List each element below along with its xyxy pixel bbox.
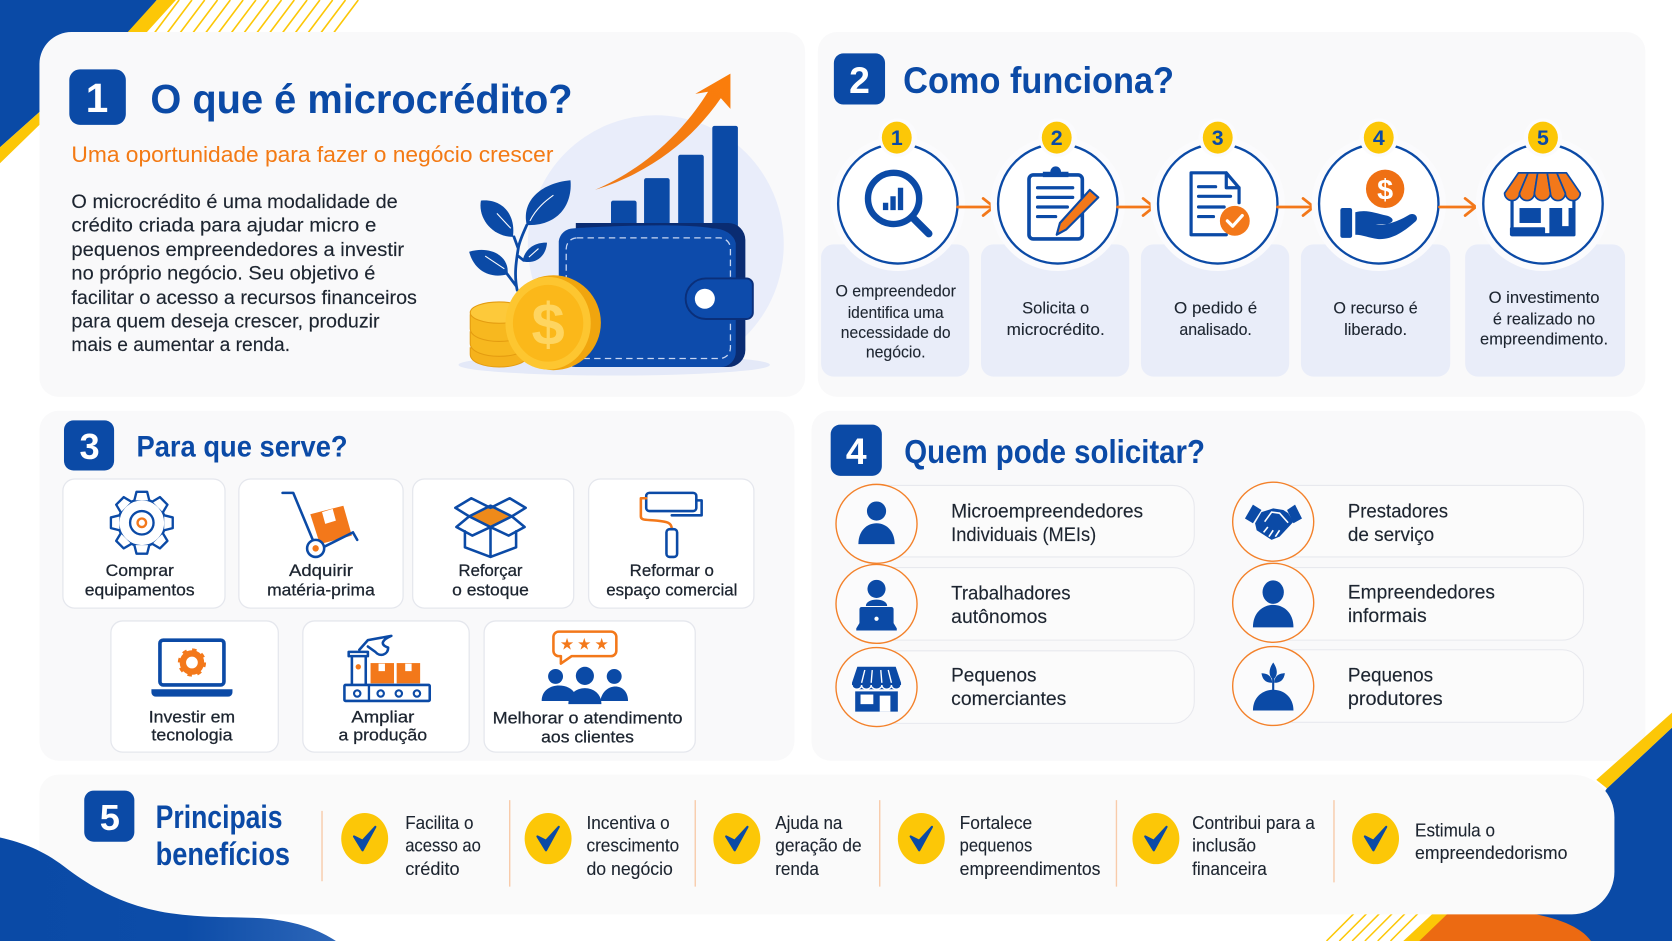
illustration: wallet, coins, plant and growth chart [459,74,784,376]
step 4: liberado. [1344,320,1407,339]
benefit 4: pequenos [960,835,1032,855]
panel: para que serve [39,411,794,761]
step 4: O recurso é [1333,299,1418,318]
heading 4: Quem pode solicitar? [904,434,1205,471]
decorative corner: bottom right [1327,713,1672,941]
item: microempreendedores individuais: Individuais (MEIs) [951,525,1096,546]
badge 4 [831,425,882,476]
benefit 3 [713,813,862,879]
benefit 2: Incentiva o [586,813,670,833]
benefit 2 [525,813,679,879]
item: pequenos produtores: produtores [1348,689,1443,710]
card: comprar equipamentos: Comprar [106,561,174,580]
card: adquirir matéria-prima: Adquirir [289,561,354,580]
benefit 3: geração de [775,835,862,855]
card: investir em tecnologia: tecnologia [151,725,233,744]
arrow [958,198,994,216]
arrow [1118,198,1154,216]
card: comprar equipamentos: equipamentos [85,580,195,599]
body text: crédito criada para ajudar micro e [71,215,377,237]
item: pequenos produtores [1233,647,1583,725]
benefit 2: do negócio [586,859,673,879]
benefit 1: acesso ao [405,835,481,855]
badge 1 [69,69,126,125]
benefit 5: Contribui para a [1192,813,1316,833]
badge 3: 3 [79,426,100,467]
badge 3 [64,420,114,470]
panel: quem pode solicitar [811,411,1645,761]
body text: no próprio negócio. Seu objetivo é [71,263,375,285]
item: prestadores de serviço: de serviço [1348,525,1434,546]
body text: mais e aumentar a renda. [71,334,290,356]
item: microempreendedores individuais: Microempreendedores [951,501,1143,522]
item: microempreendedores individuais [836,484,1194,563]
panel: principais benefícios [39,775,1614,914]
step 1: negócio. [866,342,926,361]
benefit 6 [1352,813,1568,864]
card: ampliar a produção: Ampliar [351,707,415,726]
card: adquirir matéria-prima: matéria-prima [267,580,376,599]
step 2: Solicita o [1022,299,1089,318]
card: reformar o espaço comercial [589,479,754,608]
step 4: $ [1377,175,1393,207]
step 5: O investimento [1489,288,1599,307]
step 5: 5 [1537,126,1549,150]
heading 5: benefícios [156,836,290,872]
heading 5: Principais [156,799,283,835]
step 1: O empreendedor [835,282,956,301]
badge 4: 4 [846,430,867,472]
step 3: analisado. [1179,320,1252,339]
item: trabalhadores autônomos [836,564,1194,643]
item: empreendedores informais: Empreendedores [1348,583,1495,604]
benefit 2: crescimento [586,835,679,855]
benefit 3: renda [775,859,820,879]
item: pequenos comerciantes: Pequenos [951,666,1036,687]
step 4: 4 [1373,126,1385,150]
card: reforçar o estoque: o estoque [452,580,529,599]
benefit 6: empreendedorismo [1415,843,1568,863]
card: adquirir matéria-prima [239,479,403,608]
arrow [1277,198,1314,216]
benefit 5: inclusão [1192,835,1256,855]
card: ampliar a produção [303,621,469,752]
step 3: 3 [1212,126,1224,150]
badge 2: 2 [849,59,870,101]
step 3 [1141,118,1289,377]
badge 5 [84,791,134,842]
step 1: 1 [891,126,903,150]
step 1: identifica uma [848,303,944,322]
item: empreendedores informais: informais [1348,606,1427,627]
step 2 [981,118,1129,377]
badge 2 [834,53,885,105]
arrow [1440,198,1476,216]
heading 5 [156,799,290,872]
body text: O microcrédito é uma modalidade de [71,191,398,213]
benefit 1: Facilita o [405,813,473,833]
item: pequenos comerciantes: comerciantes [951,689,1066,710]
step 4 [1301,118,1450,377]
panel: como funciona [818,32,1645,397]
card: reformar o espaço comercial: espaço comercial [606,580,737,599]
item: empreendedores informais [1233,563,1583,642]
card: investir em tecnologia [111,621,278,752]
illustration: wallet, coins, plant and growth chart: $ [531,291,565,358]
body text [71,191,417,356]
benefit 6: Estimula o [1415,820,1495,840]
card: reforçar o estoque: Reforçar [459,561,523,580]
badge 5: 5 [100,797,120,838]
card: ampliar a produção: a produção [339,725,427,744]
heading 2: Como funciona? [903,59,1174,101]
step 5: empreendimento. [1480,330,1608,349]
badge 1: 1 [86,75,108,121]
item: trabalhadores autônomos: autônomos [951,607,1047,628]
card: investir em tecnologia: Investir em [149,707,235,726]
body text: facilitar o acesso a recursos financeiros [71,287,417,309]
item: prestadores de serviço [1233,482,1583,561]
benefit 5: financeira [1192,859,1268,879]
heading 1: O que é microcrédito? [150,76,573,122]
card: melhorar o atendimento [484,621,695,752]
panel: o que é microcrédito [39,32,805,397]
card: reformar o espaço comercial: Reformar o [630,561,714,580]
item: pequenos produtores: Pequenos [1348,666,1433,687]
benefit 4: Fortalece [960,813,1032,833]
decorative corner: top left [0,0,358,163]
benefit 5 [1132,813,1316,879]
step 1: necessidade do [841,323,951,342]
card: melhorar o atendimento: aos clientes [541,728,634,747]
step 2: 2 [1051,126,1063,150]
benefit 3: Ajuda na [775,813,843,833]
item: prestadores de serviço: Prestadores [1348,501,1448,522]
card: reforçar o estoque [413,479,574,608]
subtitle: Uma oportunidade para fazer o negócio crescer [71,142,554,167]
card: melhorar o atendimento: ★★★ [560,637,609,654]
step 3: O pedido é [1174,299,1257,318]
benefit 4: empreendimentos [960,859,1100,879]
benefit 4 [898,813,1100,879]
decorative wave: bottom left [0,838,336,941]
benefit 1: crédito [405,859,460,879]
item: pequenos comerciantes [836,648,1194,727]
body text: para quem deseja crescer, produzir [71,311,380,333]
card: comprar equipamentos [63,479,225,608]
step 5: é realizado no [1493,309,1595,328]
item: trabalhadores autônomos: Trabalhadores [951,584,1071,605]
card: melhorar o atendimento: Melhorar o atendimento [493,708,682,727]
step 5 [1465,118,1625,377]
step 1 [821,118,969,377]
body text: pequenos empreendedores a investir [71,239,405,261]
benefit 1 [341,813,481,879]
step 2: microcrédito. [1007,320,1105,339]
heading 3: Para que serve? [136,431,348,464]
